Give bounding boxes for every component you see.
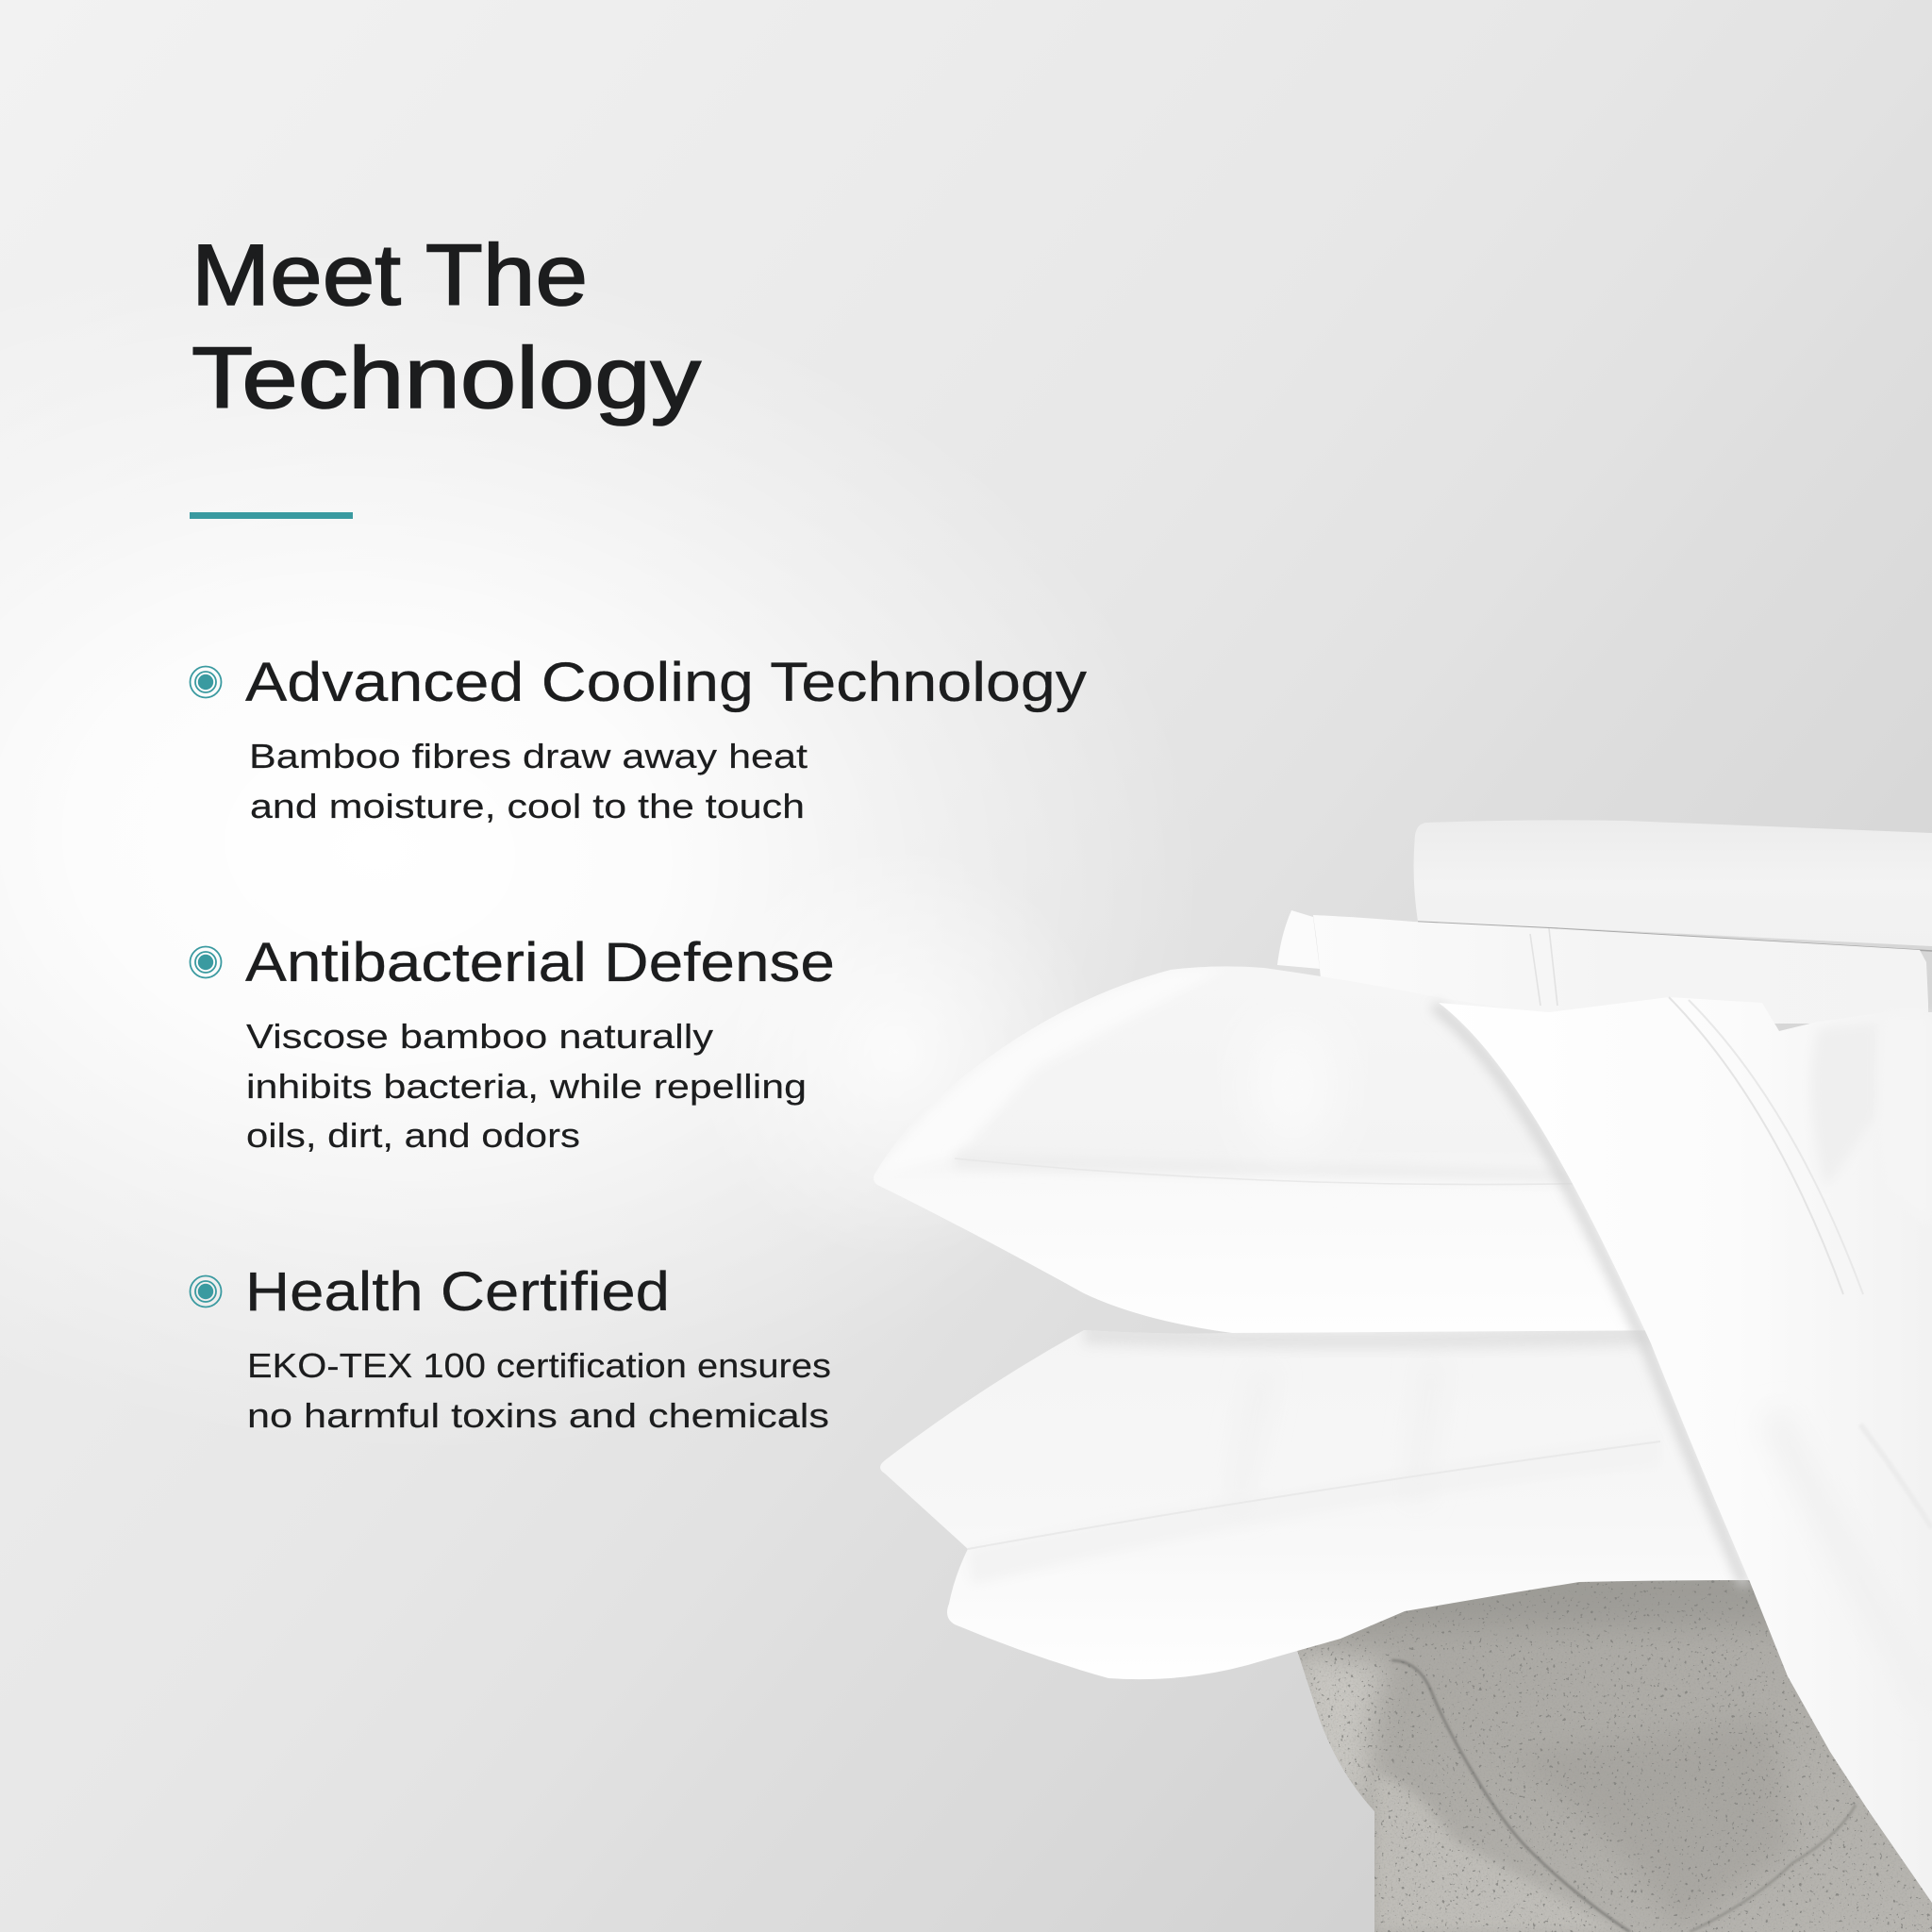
photo: concrete bust <box>1297 1580 1932 1932</box>
photo: top folded sheet <box>1414 820 1932 951</box>
feature: advanced cooling technology <box>191 652 1087 825</box>
photo: draped sheet <box>1434 997 1932 1903</box>
description <box>246 1017 807 1155</box>
description: Bamboo fibres draw away heat <box>249 737 808 775</box>
icon: teal target bullet <box>191 1275 221 1307</box>
feature: antibacterial defense <box>191 932 835 1155</box>
description: Viscose bamboo naturally <box>246 1017 713 1056</box>
description: and moisture, cool to the touch <box>250 787 805 825</box>
heading: Advanced Cooling Technology <box>245 652 1087 713</box>
icon: teal target bullet <box>191 947 221 977</box>
description: EKO-TEX 100 certification ensures <box>247 1346 831 1385</box>
icon: teal target bullet <box>191 666 221 698</box>
description <box>247 1346 831 1435</box>
title: Meet The <box>192 227 588 324</box>
description: oils, dirt, and odors <box>246 1116 580 1155</box>
description: inhibits bacteria, while repelling <box>246 1067 807 1106</box>
photo: lower pillow <box>880 1330 1749 1679</box>
photo: upper pillow <box>874 966 1645 1333</box>
heading: Health Certified <box>245 1261 670 1323</box>
heading: Antibacterial Defense <box>245 932 835 993</box>
description: no harmful toxins and chemicals <box>247 1396 829 1435</box>
title: Technology <box>192 330 701 426</box>
teal accent rule <box>190 512 353 519</box>
photo: rolled pillowcase <box>1277 910 1928 1024</box>
description <box>249 737 808 825</box>
title <box>192 227 701 426</box>
feature: health certified <box>191 1261 831 1435</box>
